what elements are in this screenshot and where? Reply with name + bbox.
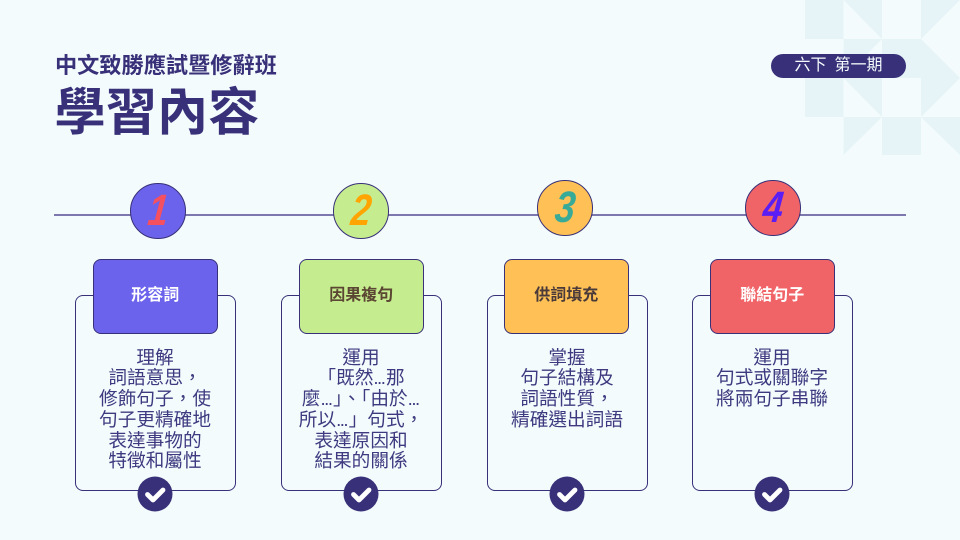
period pill: 六下 第一期 [795,57,882,74]
step 3 number: 3 [552,183,577,232]
text: 形容詞 description: 表達事物的 [108,430,202,451]
text: 供詞填充 description [511,346,623,430]
text: 因果複句 description: 「既然...那 [317,363,405,390]
step 4 number [745,180,800,236]
heading: 因果複句: 因果複句 [329,287,393,304]
heading: 形容詞 [93,259,218,334]
card outline [281,295,442,491]
text: 形容詞 description [99,346,211,471]
text: 因果複句 description: 麼...」、「由於... [302,384,419,411]
panel: 形容詞 [75,259,236,512]
text: 因果複句 description: 運用 [342,346,380,368]
text: 形容詞 description: 理解 [136,346,174,368]
heading: 因果複句 [299,259,424,334]
step 2 number: 2 [348,186,373,235]
icon: check [344,476,378,512]
decorative geometric pattern [805,0,960,155]
step 1 number [130,183,186,238]
subtitle: 中文致勝應試暨修辭班 [55,53,277,78]
card outline [75,295,236,491]
text: 形容詞 description: 修飾句子，使 [99,384,211,411]
text: 因果複句 description: 所以...」句式， [299,405,423,432]
text: 形容詞 description: 特徵和屬性 [108,450,202,471]
period pill [771,54,906,78]
card outline [487,295,648,491]
text: 供詞填充 description: 精確選出詞語 [511,409,623,430]
card outline [692,295,853,491]
heading: 聯結句子: 聯結句子 [740,287,804,304]
icon: check [138,476,172,512]
heading: 供詞填充: 供詞填充 [534,287,598,304]
heading: 形容詞: 形容詞 [131,287,179,304]
step 3 number [537,180,592,236]
heading: 供詞填充 [504,259,628,334]
text: 供詞填充 description: 句子結構及 [520,367,614,388]
text: 因果複句 description: 表達原因和 [314,430,408,451]
text: 聯結句子 description: 運用 [753,346,791,368]
text: 形容詞 description: 詞語意思， [108,363,202,390]
icon: check [754,476,790,512]
step 1 number: 1 [145,186,170,235]
text: 供詞填充 description: 掌握 [548,346,586,368]
panel: 供詞填充 [487,259,648,512]
step 4 number: 4 [760,183,785,232]
icon: check [550,476,584,512]
text: 供詞填充 description: 詞語性質， [520,384,614,411]
text: 因果複句 description [299,346,423,471]
text: 形容詞 description: 句子更精確地 [99,409,211,430]
text: 聯結句子 description [716,346,828,409]
text: 聯結句子 description: 句式或關聯字 [716,367,828,388]
step 2 number [333,183,388,238]
heading: 聯結句子 [710,259,834,334]
panel: 聯結句子 [692,259,853,512]
title: 學習內容 [54,84,259,141]
timeline line [54,214,906,216]
text: 聯結句子 description: 將兩句子串聯 [716,388,828,409]
panel: 因果複句 [281,259,442,512]
text: 因果複句 description: 結果的關係 [314,450,408,471]
